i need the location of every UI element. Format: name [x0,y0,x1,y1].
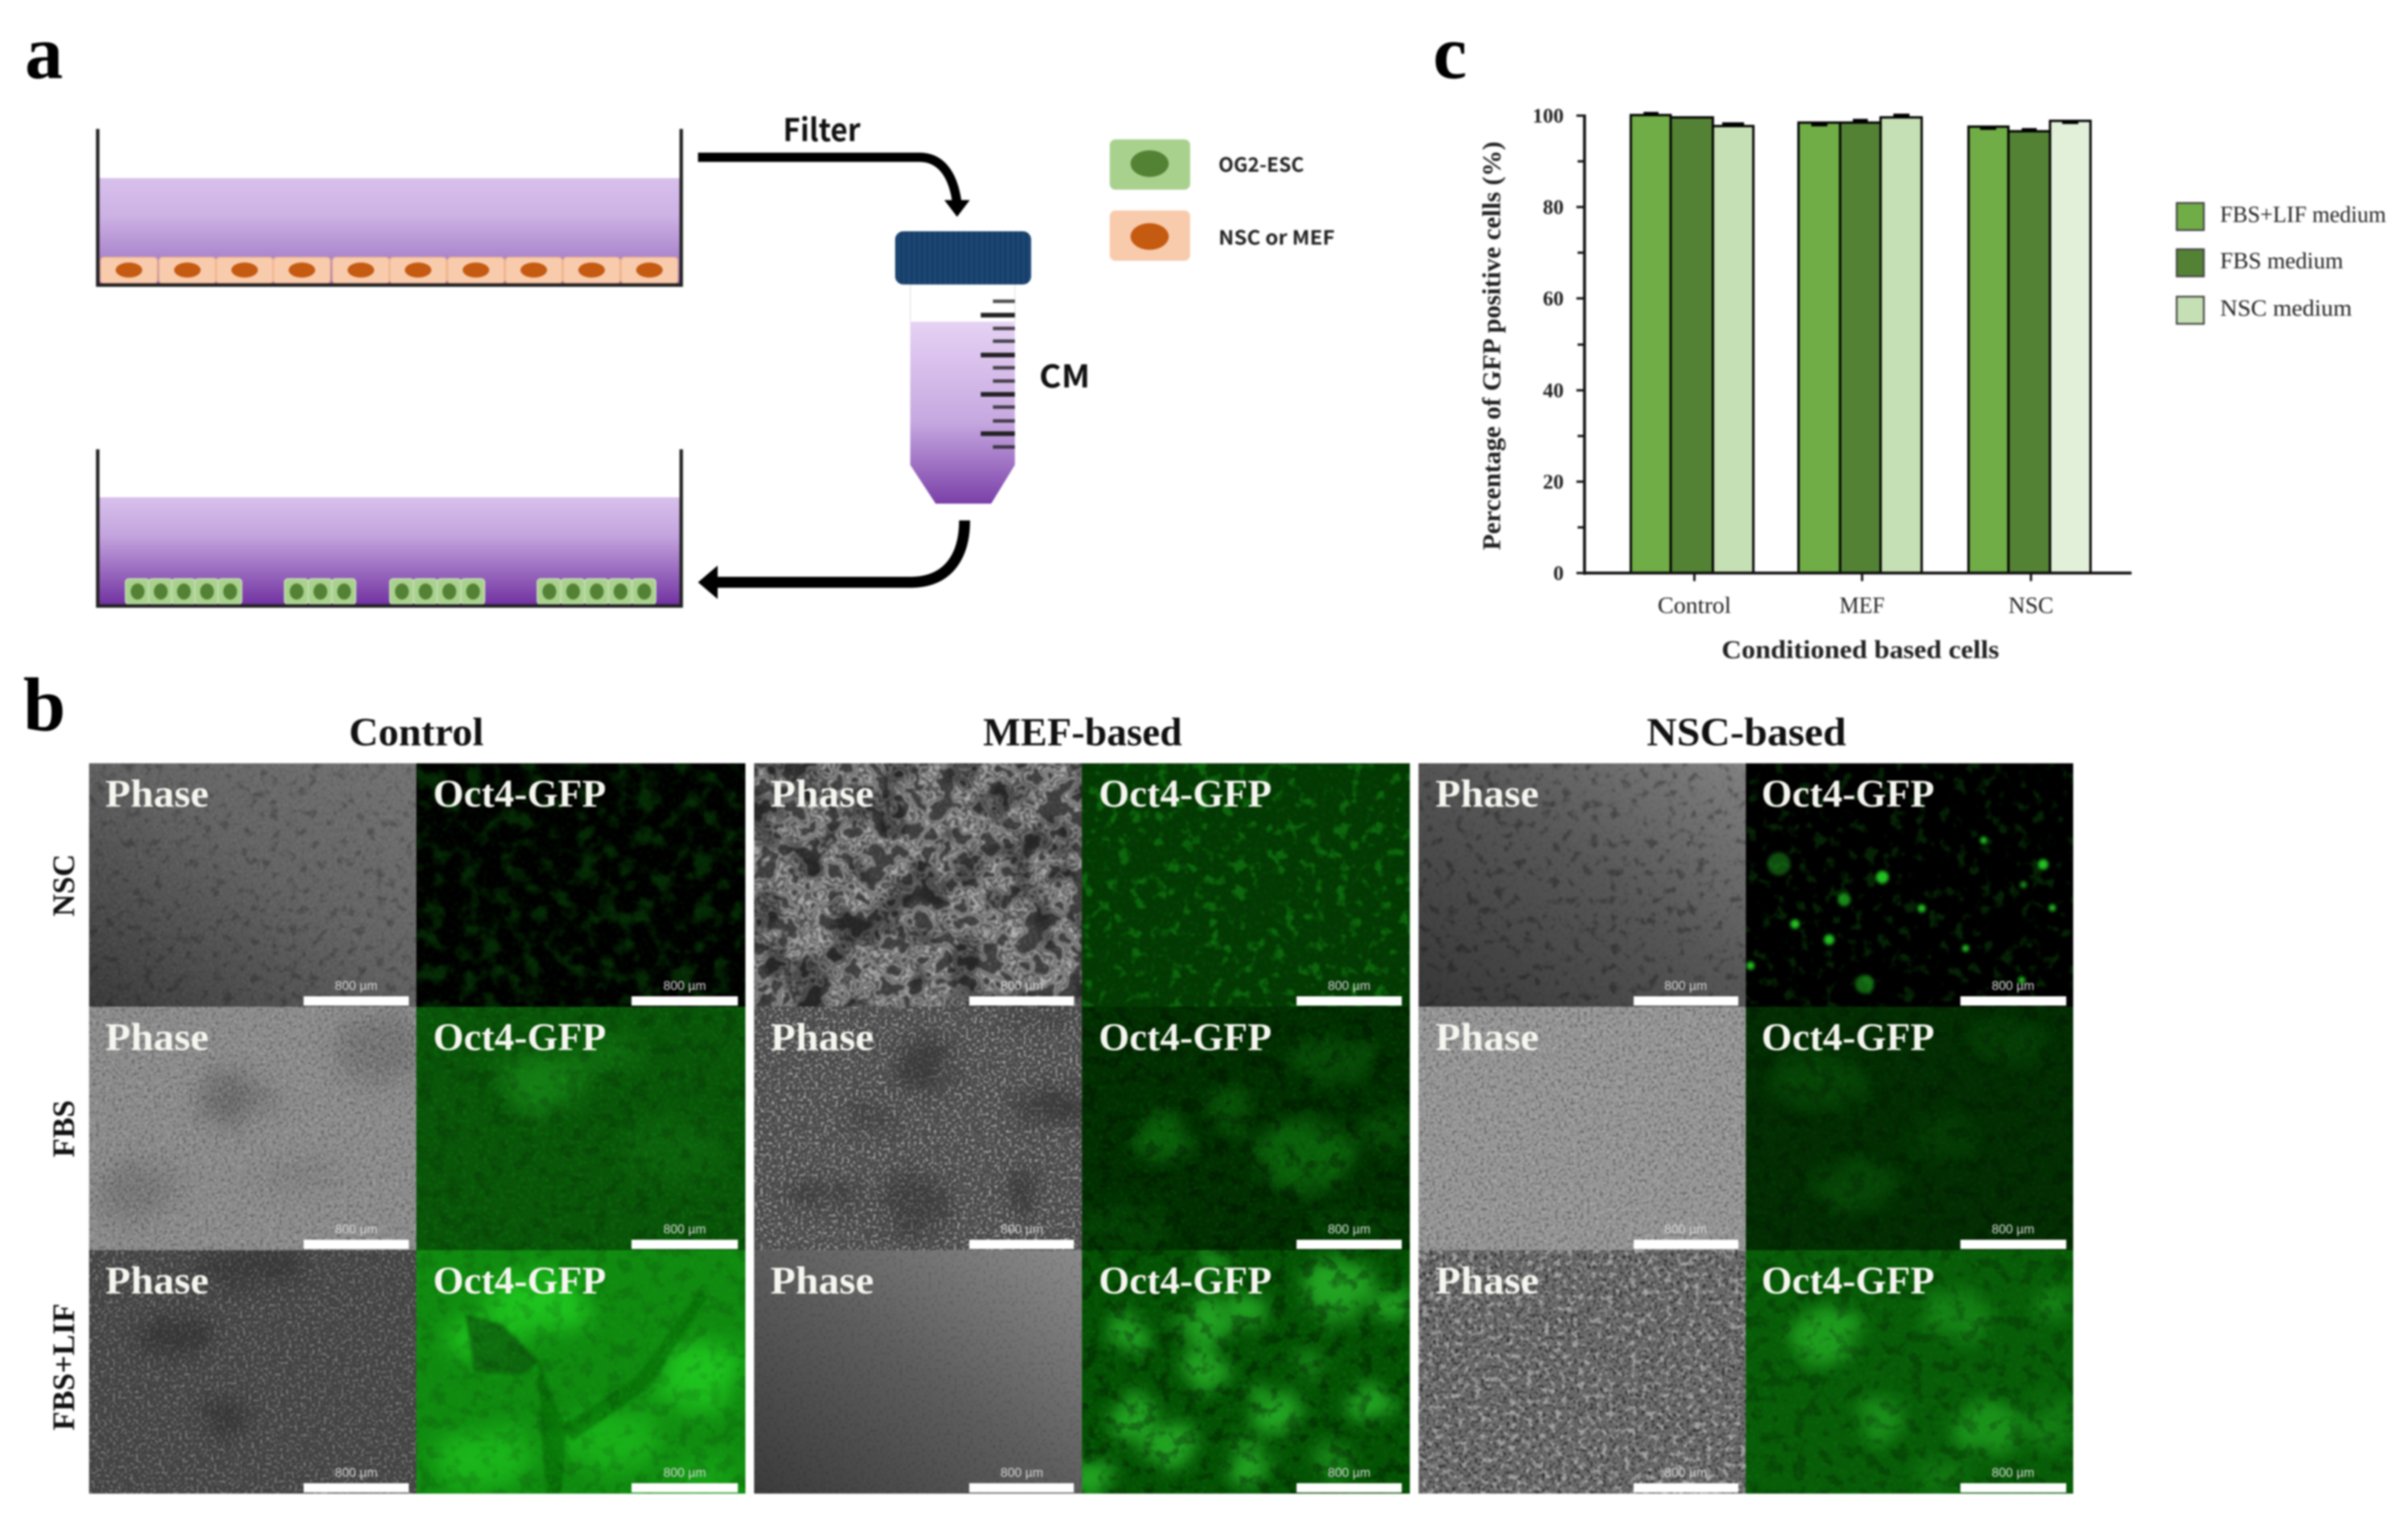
image: MEF NSC phase [754,763,1082,1007]
image: NSC NSC Oct4-GFP: 800 µm [1992,978,2034,993]
image: MEF NSC Oct4-GFP: Oct4-GFP [1099,771,1272,815]
legend: cell types [1110,139,1335,261]
image: Control FBS Oct4-GFP: 800 µm [663,1222,706,1236]
image: Control FBS phase [89,1007,419,1250]
image: NSC FBS phase: 800 µm [1664,1222,1707,1236]
column heading: MEF-based: MEF-based [983,710,1182,754]
y axis title: Percentage of GFP positive cells (%) [1478,141,1506,550]
culture dish with OG2-ESC colonies [98,449,681,606]
image: MEF FBS Oct4-GFP [1070,1007,1412,1250]
image: NSC FBS+LIF phase: 800 µm [1664,1465,1707,1480]
image: NSC FBS phase: Phase [1435,1015,1539,1059]
panel label c: c [1433,10,1467,95]
image: NSC FBS Oct4-GFP: Oct4-GFP [1761,1015,1934,1059]
conical tube of conditioned medium [895,231,1031,504]
x axis category labels [1657,592,2054,618]
bars: Control [1631,115,1753,573]
y axis tick labels [1532,104,1564,585]
image: NSC FBS Oct4-GFP [1746,1007,2073,1250]
image: NSC NSC phase [1419,763,1746,1007]
row label: FBS: FBS [46,1100,81,1158]
image: Control FBS+LIF Oct4-GFP [416,1250,746,1494]
error bars [1644,113,2078,130]
image: MEF NSC phase: 800 µm [1000,978,1043,993]
image: Control FBS+LIF phase: 800 µm [335,1465,378,1480]
image: Control FBS+LIF Oct4-GFP: 800 µm [663,1465,706,1480]
image: MEF NSC phase: Phase [770,771,874,815]
x axis category labels: MEF [1840,592,1885,618]
chart legend: FBS+LIF medium [2220,201,2386,227]
arrow: tube to OG2-ESC dish [698,520,965,599]
image: MEF FBS phase: Phase [770,1015,874,1059]
tube cap [895,231,1031,284]
image: Control NSC Oct4-GFP [416,763,745,1007]
image: MEF FBS+LIF Oct4-GFP [1074,1246,1410,1495]
x axis category labels: NSC [2008,592,2054,618]
label: CM: CM [1039,351,1090,397]
axes [1576,114,2132,581]
arrow: filter to tube [698,157,970,217]
panel label b: b [23,662,65,747]
image: MEF FBS Oct4-GFP: Oct4-GFP [1099,1015,1272,1059]
chart legend: NSC medium [2220,295,2352,321]
panel c: GFP positive bar chart [1478,104,2386,664]
image: NSC FBS+LIF Oct4-GFP: 800 µm [1992,1465,2034,1480]
image: MEF FBS phase [754,1007,1089,1250]
image: NSC NSC phase: Phase [1435,771,1539,815]
image: Control FBS+LIF Oct4-GFP: Oct4-GFP [433,1258,606,1302]
legend: cell types: OG2-ESC [1218,149,1304,178]
image: Control NSC Oct4-GFP: 800 µm [663,978,706,993]
label: Filter: Filter [783,105,860,150]
y axis tick labels: 0 [1553,561,1564,585]
image: NSC NSC Oct4-GFP [1746,763,2073,1007]
image: Control NSC Oct4-GFP: Oct4-GFP [433,771,606,815]
panel a: conditioned medium schematic [98,105,1335,606]
image: MEF NSC Oct4-GFP: 800 µm [1328,978,1371,993]
image: MEF FBS+LIF phase: Phase [770,1258,874,1302]
column heading: Control: Control [349,710,483,754]
image: Control FBS Oct4-GFP: Oct4-GFP [433,1015,606,1059]
image: MEF FBS+LIF phase [754,1250,1082,1494]
image: NSC NSC Oct4-GFP: Oct4-GFP [1761,771,1934,815]
culture dish with NSC or MEF feeder cells [98,129,681,285]
image: Control FBS phase: 800 µm [335,1222,378,1236]
row label: NSC: NSC [46,854,81,917]
image: MEF FBS phase: 800 µm [1000,1222,1043,1236]
image: MEF FBS Oct4-GFP: 800 µm [1328,1222,1371,1236]
y axis tick labels: 60 [1543,287,1564,310]
image: Control FBS+LIF phase [89,1250,416,1494]
bars: NSC [1968,121,2091,573]
image: Control NSC phase: Phase [105,771,209,815]
image: NSC FBS+LIF Oct4-GFP [1746,1250,2073,1494]
legend: cell types: NSC or MEF [1218,222,1335,250]
panel label a: a [25,10,63,95]
image: Control NSC phase: 800 µm [335,978,378,993]
image: Control FBS+LIF phase: Phase [105,1258,209,1302]
y axis tick labels: 40 [1543,379,1564,402]
x axis category labels: Control [1657,592,1731,618]
image: MEF NSC Oct4-GFP [1082,763,1410,1007]
image: NSC FBS Oct4-GFP: 800 µm [1992,1222,2034,1236]
x axis title: Conditioned based cells [1722,635,1999,664]
image: MEF FBS+LIF Oct4-GFP: Oct4-GFP [1099,1258,1272,1302]
y axis tick labels: 20 [1543,470,1564,493]
y axis tick labels: 100 [1532,104,1564,127]
column heading: NSC-based: NSC-based [1647,710,1846,754]
image: MEF FBS+LIF phase: 800 µm [1000,1465,1043,1480]
image: MEF FBS+LIF Oct4-GFP: 800 µm [1328,1465,1371,1480]
y axis tick labels: 80 [1543,195,1564,219]
chart legend [2177,201,2386,324]
image: NSC NSC phase: 800 µm [1664,978,1707,993]
image: Control NSC phase [89,763,416,1007]
image: NSC FBS+LIF phase [1419,1250,1746,1494]
row label: FBS+LIF: FBS+LIF [46,1303,81,1431]
chart legend: FBS medium [2220,247,2343,274]
image: Control FBS Oct4-GFP [416,1007,745,1250]
image: NSC FBS phase [1419,1007,1746,1250]
image: NSC FBS+LIF phase: Phase [1435,1258,1539,1302]
bars: MEF [1798,117,1922,573]
panel b: microscopy grid [46,710,2073,1495]
image: NSC FBS+LIF Oct4-GFP: Oct4-GFP [1761,1258,1934,1302]
image: Control FBS phase: Phase [105,1015,209,1059]
